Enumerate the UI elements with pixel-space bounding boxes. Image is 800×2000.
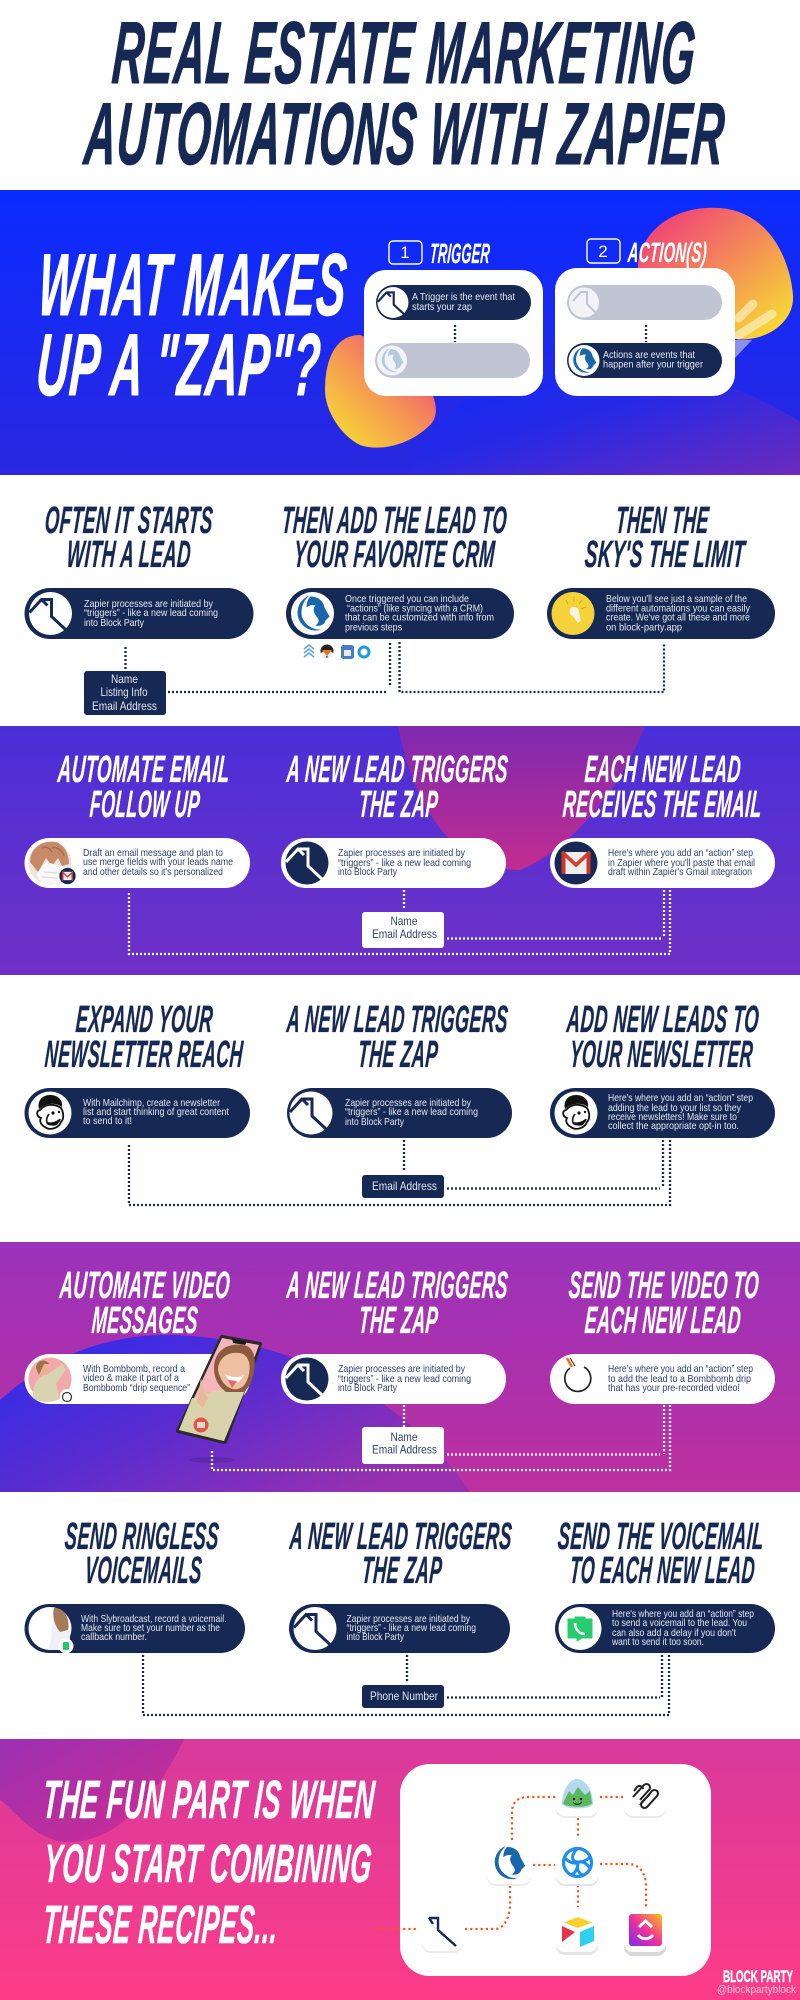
blob: left gradient [325,335,436,448]
pill: gmail action: in Zapier where you'll paste that email [608,858,755,869]
pill: action description [567,343,722,378]
phone: video call photo [178,1337,260,1463]
pill: zapier trigger: “triggers” - like a new lead coming [338,858,471,869]
panel: automate email follow up: A NEW LEAD TRIGGERS [285,749,509,791]
box: lead fields: Name [111,673,138,686]
panel: automate email follow up: AUTOMATE EMAIL [56,749,231,791]
pill: slybroadcast: callback number. [81,1632,147,1643]
pill: bombbomb action [550,1354,775,1404]
pill: zapier trigger: Zapier processes are initiated by [338,848,466,859]
heading: the fun part [41,1770,377,1955]
pill: zapier trigger: Zapier processes are initiated by [338,1364,466,1375]
pill: zapier trigger: into Block Party [338,1383,398,1394]
icon card: lightbulb pill: create. We've got all these and more [606,613,750,624]
heading: add new leads to your newsletter [565,999,760,1076]
heading: a new lead triggers the zap: THE ZAP [358,784,439,826]
heading: a new lead triggers the zap: THE ZAP [357,1034,439,1076]
pill: voicemail action: to send a voicemail to the lead. You [612,1618,747,1629]
pill: draft email: use merge fields with your leads name [83,857,233,868]
panel: automate email follow up [0,726,800,975]
blob: top right gradient [638,208,793,339]
pill: zapier trigger [287,1088,512,1138]
pill: zapier trigger: Zapier processes are initiated by [345,1098,472,1109]
box: email address field [362,1175,444,1198]
pill: voicemail action [555,1604,775,1653]
pill: draft email: and other details so it's personalized [83,867,223,878]
pill: zapier trigger [24,588,254,639]
label: step 2 actions [587,237,708,268]
heading: the fun part: THE FUN PART IS WHEN [41,1770,377,1830]
card: recipe network [372,1764,711,1976]
pill: trigger description [376,285,531,320]
pill: bombbomb action: that has your pre-recorded video! [608,1383,740,1394]
pill: action placeholder [375,343,530,378]
label: step 2 actions: ACTION(S) [626,237,708,268]
pill: zapier trigger: Zapier processes are initiated by [84,599,214,610]
pill: gmail action [550,838,775,888]
pill: draft email: Draft an email message and plan to [83,848,223,859]
icons: CRM logos [304,644,369,659]
tile: block party [422,1908,463,1953]
pill: mailchimp list: With Mailchimp, create a newsletter [83,1098,220,1109]
pill: bombbomb action: Here's where you add an “action” step [608,1364,753,1375]
pill: voicemail action: want to send it too soon. [611,1637,704,1648]
heading: a new lead triggers the zap [285,1265,509,1342]
pill: zapier trigger: into Block Party [84,618,145,629]
connector: voicemail flow [143,1653,669,1715]
connector: lead to CRM and beyond [126,642,664,692]
heading: sky's the limit [584,500,747,576]
box: lead fields: Email Address [92,700,157,713]
heading: a new lead triggers the zap: THE ZAP [358,1300,439,1342]
connector: video flow [212,1405,670,1470]
icon card: lightbulb pill [547,588,775,639]
pill: voicemail action: can also add a delay if you don't [612,1628,736,1639]
pill: bombbomb video: With Bombbomb, record a [83,1364,185,1375]
pill: bombbomb action: to add the lead to a Bombbomb drip [608,1374,751,1385]
box: lead fields [84,671,166,715]
connector: newsletter flow [129,1140,670,1205]
heading: a new lead triggers the zap: THE ZAP [361,1550,443,1592]
heading: a new lead triggers the zap [285,999,509,1076]
panel: automate video messages: AUTOMATE VIDEO [58,1265,231,1307]
pill: bombbomb video: Bombbomb “drip sequence” [83,1383,190,1394]
panel: title [0,0,800,190]
pill: bombbomb video: video & make it part of a [83,1373,179,1384]
pill: zapier trigger [281,838,506,888]
pill: gmail action: Here's where you add an “action” step [608,848,753,859]
panel: start with a lead [0,475,800,726]
heading: expand your newsletter reach: EXPAND YOUR [75,999,214,1041]
pill: voicemail action: Here's where you add an “action” step [612,1609,754,1620]
heading: add the lead to your CRM: YOUR FAVORITE CRM [293,534,497,576]
pill: trigger placeholder [567,285,722,320]
panel: automate video messages: A NEW LEAD TRIGGERS [285,1265,509,1307]
pill: mailchimp list: to send to it! [83,1116,132,1127]
box: lead fields: Email Address [372,928,437,941]
pill: bombbomb video [24,1354,250,1404]
heading: each new lead receives the email [562,749,763,826]
tile: clickup [624,1908,666,1956]
panel: send ringless voicemails: SEND RINGLESS [64,1516,220,1558]
pill: slybroadcast [24,1604,245,1654]
panel: combining recipes [0,1739,800,2000]
pill: zapier trigger [281,1354,506,1404]
heading: what makes up a zap: WHAT MAKES [36,235,350,334]
panel: send ringless voicemails: A NEW LEAD TRIGGERS [288,1516,513,1558]
panel: expand your newsletter reach: A NEW LEAD TRIGGERS [285,999,509,1041]
panel: start with a lead: THEN ADD THE LEAD TO [281,500,508,542]
pill: CRM actions: that can be customized with info from [345,613,494,624]
pill: mailchimp action [550,1088,775,1138]
heading: automate video messages [58,1265,231,1342]
box: lead fields [362,1427,444,1464]
box: lead fields [362,912,444,948]
pill: zapier trigger: “triggers” - like a new lead coming [338,1374,471,1385]
pill: slybroadcast: Make sure to set your number as the [81,1623,220,1634]
pill: zapier trigger: “triggers” - like a new lead coming [346,1623,476,1634]
pill: mailchimp action: adding the lead to your list so they [608,1103,742,1114]
pill: zapier trigger: Zapier processes are initiated by [346,1614,471,1625]
pill: CRM actions [286,588,514,639]
label: step 1 trigger [389,238,491,269]
pill: mailchimp action: receive newsletters! Make sure to [608,1112,737,1123]
box: phone number field: Phone Number [370,1690,438,1703]
panel: expand your newsletter reach [0,975,800,1242]
panel: automate video messages [0,1242,800,1492]
icon card: lightbulb pill: on block-party.app [606,623,682,634]
card: actions [555,268,735,396]
heading: often it starts with a lead: WITH A LEAD [66,534,192,576]
heading: send the video [568,1265,760,1342]
pill: trigger description: starts your zap [412,302,472,313]
panel: start with a lead: OFTEN IT STARTS [44,500,214,542]
tile: airtable [556,1908,598,1955]
heading: add the lead to your CRM [281,500,508,576]
panel: send ringless voicemails [0,1492,800,1739]
label: step 1 trigger: 1 [400,243,410,262]
pill: mailchimp action: Here's where you add an “action” step [608,1093,753,1104]
panel: what makes up a zap [0,190,800,475]
box: email address field: Email Address [372,1180,437,1193]
tile: basecamp [556,1773,598,1818]
heading: automate email follow up: FOLLOW UP [89,784,201,826]
pill: action description: Actions are events that [603,350,695,361]
box: lead fields: Name [390,1431,418,1444]
pill: CRM actions: previous steps [345,623,402,634]
pill: zapier trigger: into Block Party [338,867,398,878]
pill: CRM actions: Once triggered you can include [345,594,469,605]
panel: what makes up a zap: TRIGGER [429,238,491,269]
pill: mailchimp list [24,1088,250,1138]
pill: draft email [24,838,250,888]
heading: send the voicemail [557,1516,765,1592]
pill: mailchimp action: collect the appropriate opt-in too. [608,1121,739,1132]
tile: squarespace [624,1773,666,1818]
icon card: lightbulb pill: Below you'll see just a sample of the [606,594,747,605]
heading: what makes up a zap: UP A "ZAP"? [34,315,324,414]
brand: block party [717,1967,796,1996]
pill: CRM actions: “actions” (like syncing with a CRM) [347,604,483,614]
pill: action description: happen after your trigger [603,360,704,370]
heading: a new lead triggers the zap [288,1516,513,1592]
heading: the fun part: THESE RECIPES... [41,1895,280,1955]
heading: what makes up a zap [34,235,350,414]
pill: zapier trigger: “triggers” - like a new lead coming [345,1107,478,1118]
tile: CRM lion [487,1842,531,1886]
card: trigger [364,270,543,396]
pill: trigger description: A Trigger is the event that [412,292,515,303]
panel: expand your newsletter reach: NEWSLETTER REACH [44,1034,245,1076]
connector: email flow [129,890,670,954]
pill: zapier trigger: into Block Party [346,1632,405,1643]
connectors: recipe links [372,1797,646,1929]
icon card: lightbulb pill: different automations you can easily [606,604,751,614]
pill: zapier trigger: “triggers” - like a new lead coming [84,608,218,619]
heading: the fun part: YOU START COMBINING [42,1834,374,1894]
box: lead fields: Listing Info [100,686,148,699]
box: lead fields: Name [390,915,418,928]
pill: zapier trigger [289,1604,510,1653]
heading: automate video messages: MESSAGES [91,1300,199,1342]
box: phone number field [362,1685,444,1708]
heading: expand your newsletter reach [44,999,245,1076]
pill: mailchimp list: list and start thinking of great content [83,1107,229,1118]
pill: slybroadcast: With Slybroadcast, record a voicemail. [81,1614,226,1625]
tile: sendinblue [556,1841,599,1886]
label: step 2 actions: 2 [598,242,608,261]
heading: send ringless voicemails [64,1516,220,1592]
pill: zapier trigger: into Block Party [345,1117,405,1128]
heading: a new lead triggers the zap [285,749,509,826]
heading: automate email follow up [56,749,231,826]
box: lead fields: Email Address [372,1444,437,1456]
pill: gmail action: draft within Zapier's Gmail integration [608,867,752,878]
heading: send ringless voicemails: VOICEMAILS [84,1550,203,1592]
heading: often it starts with a lead [44,500,214,576]
